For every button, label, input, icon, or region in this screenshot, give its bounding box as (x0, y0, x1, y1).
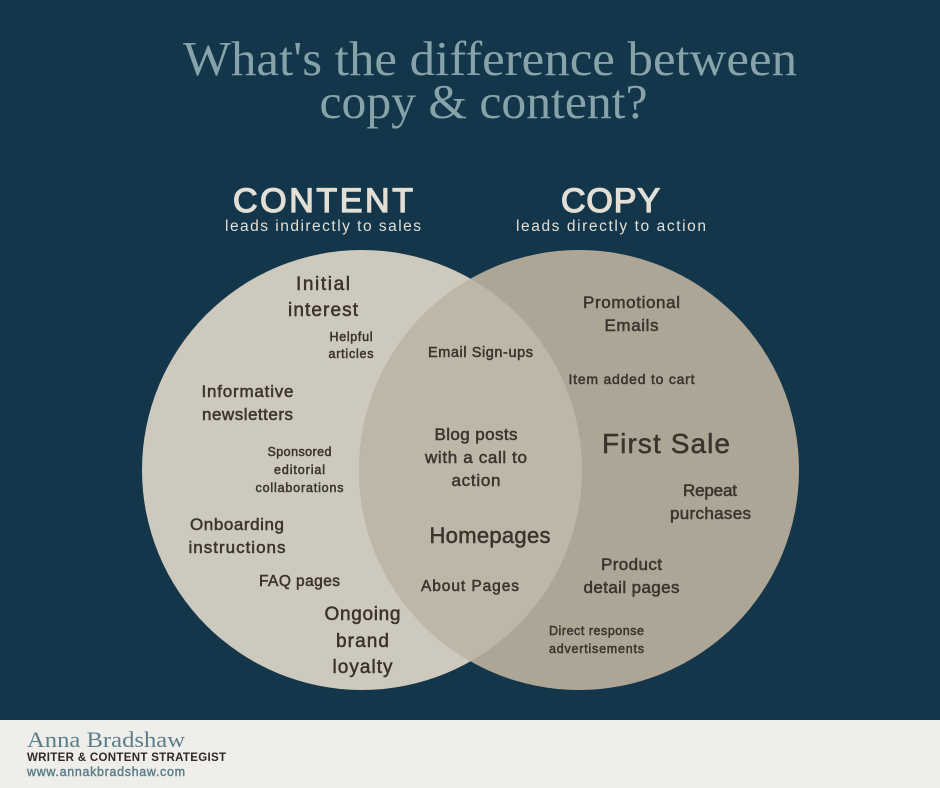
heading: content: leads indirectly to sales (225, 218, 421, 235)
overlap region (359, 279, 582, 661)
overlap labels: Blog posts (434, 425, 518, 444)
content labels: editorial (274, 463, 325, 477)
copy labels: First Sale (602, 428, 730, 459)
content labels: Onboarding (190, 515, 284, 534)
content labels: articles (328, 347, 374, 361)
copy labels: Repeat (683, 481, 737, 500)
copy labels: Emails (604, 316, 658, 335)
content labels: instructions (188, 538, 286, 557)
overlap labels: Email Sign-ups (428, 345, 533, 361)
footer: website: www.annakbradshaw.com (26, 765, 185, 779)
content labels: Ongoing (324, 604, 400, 625)
copy labels: Direct response (549, 624, 644, 638)
content labels: Helpful (330, 330, 372, 344)
footer: author name: Anna Bradshaw (27, 727, 186, 752)
overlap labels: About Pages (421, 578, 519, 595)
copy labels: detail pages (584, 578, 680, 597)
overlap labels: Homepages (430, 523, 550, 548)
overlap labels (421, 345, 550, 595)
footer band (0, 720, 940, 788)
copy labels: Item added to cart (568, 371, 695, 387)
copy labels: Promotional (583, 293, 680, 312)
copy labels: purchases (670, 504, 751, 523)
title: What's the difference between (183, 31, 797, 86)
heading: content (225, 182, 421, 235)
overlap labels: action (452, 471, 500, 490)
copy labels: advertisements (549, 642, 644, 656)
content labels: brand (336, 631, 389, 652)
circle: content (142, 250, 582, 690)
title: copy & content? (320, 74, 648, 129)
footer: role: WRITER & CONTENT STRATEGIST (27, 752, 226, 764)
venn diagram (142, 250, 799, 690)
content labels: collaborations (256, 481, 344, 495)
copy labels (549, 293, 751, 656)
content labels: Sponsored (268, 445, 332, 459)
circle: copy (359, 250, 799, 690)
content labels: FAQ pages (259, 573, 340, 590)
content labels (188, 274, 400, 678)
heading: copy: leads directly to action (516, 218, 706, 235)
copy labels: Product (601, 555, 662, 574)
title (183, 31, 797, 129)
overlap labels: with a call to (424, 448, 527, 467)
content labels: Initial (296, 274, 350, 295)
heading: copy (516, 182, 706, 235)
content labels: interest (288, 300, 359, 321)
content labels: Informative (202, 382, 294, 401)
content labels: loyalty (332, 657, 393, 678)
heading: content: CONTENT (233, 182, 413, 220)
content labels: newsletters (202, 405, 293, 424)
heading: copy: COPY (561, 182, 660, 220)
